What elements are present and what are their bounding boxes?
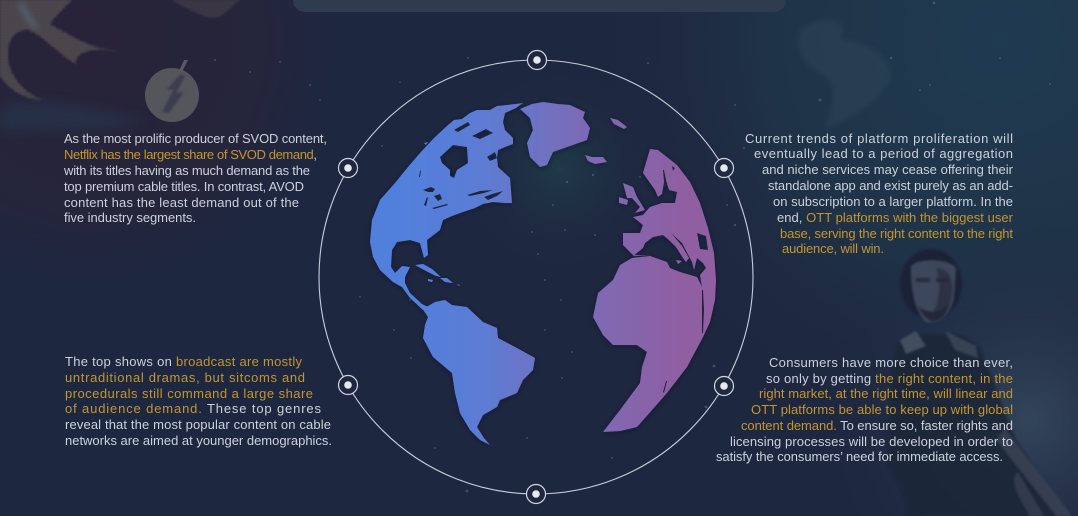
text block: consumer choice: content demand. To ensure so, faster rights and xyxy=(741,418,1013,433)
text block: consumer choice xyxy=(716,355,1013,464)
island: Sicily xyxy=(676,260,682,264)
node: top xyxy=(528,50,546,70)
text block: platform trends: standalone app and exist purely as an add- xyxy=(768,178,1013,193)
text block: broadcast shows: reveal that the most popular content on cable xyxy=(65,417,331,432)
node: lower left xyxy=(338,376,358,394)
text block: consumer choice: OTT platforms be able to keep up with global xyxy=(751,402,1013,417)
icon: lightning badge xyxy=(145,60,199,122)
text block: platform trends: and niche services may cease offering their xyxy=(762,162,1014,177)
image: cosmic figure top left xyxy=(0,0,240,132)
text block: consumer choice: so only by getting the right content, in the xyxy=(766,371,1013,386)
continent: Greenland xyxy=(520,102,590,167)
ring with nodes xyxy=(319,50,753,504)
text block: consumer choice: satisfy the consumers’ need for immediate access. xyxy=(716,449,1003,464)
island: Ireland xyxy=(619,197,628,205)
node: lower right xyxy=(714,376,734,396)
text block: platform trends: base, serving the right content to the right xyxy=(780,226,1013,241)
text block: platform trends xyxy=(745,131,1014,256)
node: upper right xyxy=(714,158,734,178)
text block: platform trends: audience, will win. xyxy=(782,241,884,256)
text block: broadcast shows xyxy=(65,354,332,448)
text block: Netflix share: top premium cable titles. In contrast, AVOD xyxy=(64,179,304,194)
globe xyxy=(370,102,716,445)
text block: platform trends: end, OTT platforms with the biggest user xyxy=(777,210,1014,225)
text block: Netflix share: content has the least demand out of the xyxy=(64,195,299,210)
continent: Eurasia and Africa xyxy=(593,149,716,432)
text block: platform trends: eventually lead to a period of aggregation xyxy=(754,146,1013,161)
island: Hispaniola xyxy=(440,278,453,283)
text block: Netflix share: with its titles having as much demand as the xyxy=(63,163,310,178)
continent: North America xyxy=(370,103,523,310)
text block: Netflix share: As the most prolific producer of SVOD content, xyxy=(64,131,327,146)
text block: Netflix share xyxy=(63,131,327,225)
text block: Netflix share: five industry segments. xyxy=(64,210,196,225)
text block: broadcast shows: untraditional dramas, but sitcoms and xyxy=(65,370,305,385)
image: man with rifle xyxy=(887,249,1072,516)
text block: platform trends: on subscription to a larger platform. In the xyxy=(773,194,1013,209)
node: bottom xyxy=(526,484,546,504)
island: Caribbean small xyxy=(428,279,460,286)
text block: consumer choice: licensing processes will be developed in order to xyxy=(730,434,1013,449)
top bar panel xyxy=(293,0,786,12)
text block: consumer choice: Consumers have more choice than ever, xyxy=(769,355,1013,370)
text block: consumer choice: right market, at the right time, will linear and xyxy=(759,386,1013,401)
island: Cuba xyxy=(415,264,441,277)
text block: broadcast shows: procedurals still command a large share xyxy=(65,386,313,401)
text block: broadcast shows: networks are aimed at younger demographics. xyxy=(65,433,332,448)
island: Britain xyxy=(623,183,645,213)
island: Svalbard xyxy=(610,118,627,129)
continent: South America xyxy=(422,300,535,445)
text block: broadcast shows: of audience demand. These top genres xyxy=(65,401,322,416)
text block: Netflix share: Netflix has the largest share of SVOD demand, xyxy=(64,147,317,162)
node: upper left xyxy=(338,158,358,178)
text block: broadcast shows: The top shows on broadcast are mostly xyxy=(65,354,302,369)
text block: platform trends: Current trends of platform proliferation will xyxy=(745,131,1013,146)
island: Iceland xyxy=(585,155,607,164)
